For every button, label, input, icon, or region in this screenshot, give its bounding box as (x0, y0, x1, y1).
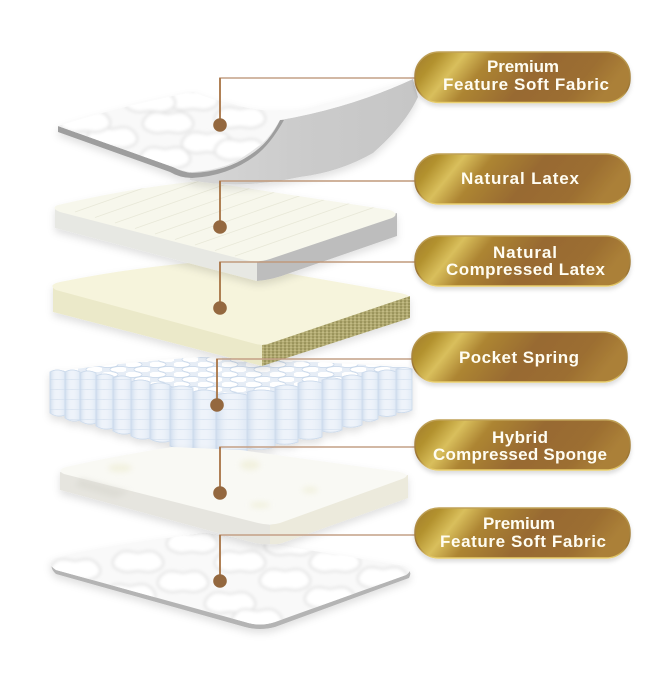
connector: natural latex (213, 181, 415, 234)
label pill: Premium Feature Soft Fabric (bottom): Feature Soft Fabric (440, 532, 606, 551)
label pill: Premium Feature Soft Fabric (bottom): Premium (483, 514, 555, 533)
layer: hybrid compressed sponge (60, 447, 408, 544)
layer: pocket spring (50, 357, 412, 455)
connector: pocket spring (210, 359, 412, 412)
label pill: Premium Feature Soft Fabric (415, 52, 630, 102)
layer: natural latex (52, 182, 400, 287)
connector: bottom premium soft fabric (213, 535, 415, 588)
label pill: Natural Latex (415, 154, 630, 204)
layer: top premium soft fabric (58, 79, 418, 184)
label pill: Hybrid Compressed Sponge: Hybrid (492, 428, 548, 447)
label pill: Pocket Spring: Pocket Spring (459, 348, 579, 367)
label pill: Premium Feature Soft Fabric: Premium (487, 57, 559, 76)
label pill: Natural Latex: Natural Latex (461, 169, 580, 188)
label pill: Premium Feature Soft Fabric (bottom) (415, 508, 630, 558)
spring tops (50, 357, 412, 402)
connector: top premium soft fabric (213, 78, 415, 132)
latex ribs (75, 182, 374, 256)
label pill: Natural Compressed Latex: Compressed Latex (446, 260, 606, 279)
layer: natural compressed latex (52, 262, 410, 366)
label pill: Hybrid Compressed Sponge (415, 420, 630, 470)
label pill: Natural Compressed Latex: Natural (493, 243, 557, 262)
connector: hybrid compressed sponge (213, 447, 415, 500)
label pill: Pocket Spring (412, 332, 627, 382)
layer: bottom premium soft fabric (50, 532, 410, 630)
label pill: Premium Feature Soft Fabric: Feature Soft Fabric (443, 75, 609, 94)
label pill: Hybrid Compressed Sponge: Compressed Sponge (433, 445, 607, 464)
sponge blotches (108, 460, 318, 508)
label pill: Natural Compressed Latex (415, 236, 630, 286)
connector: natural compressed latex (213, 262, 415, 315)
spring columns (50, 368, 412, 455)
